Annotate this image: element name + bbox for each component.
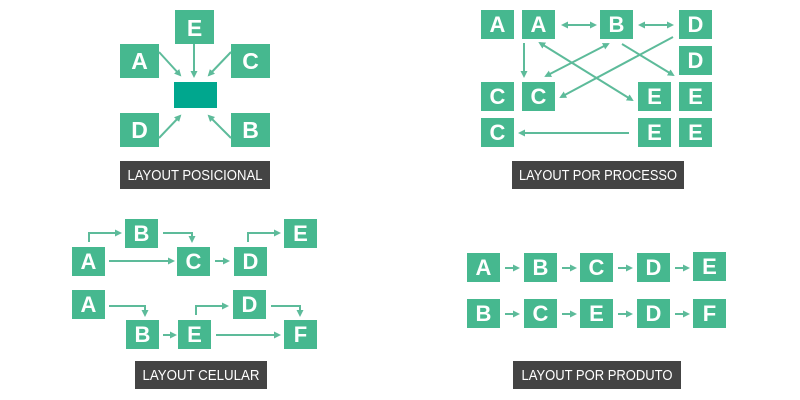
boxes [481,10,712,147]
label: layout por processo: LAYOUT POR PROCESSO [519,168,677,184]
central work area [174,82,217,108]
boxes: E [187,322,202,347]
panel: layout por produto [467,252,726,389]
boxes: C [490,120,506,145]
boxes: C [531,84,547,109]
boxes: A [81,292,97,317]
boxes: B [135,322,150,347]
boxes: C [186,249,202,274]
boxes: A [476,255,492,280]
box B: B [242,117,259,143]
boxes: C [533,301,549,326]
boxes: E [589,301,604,326]
boxes [72,219,317,349]
boxes: C [490,84,506,109]
box C [231,44,270,78]
boxes: D [243,249,258,274]
panel: layout celular [72,219,317,389]
box A: A [131,48,148,74]
boxes: B [609,12,624,37]
arrows into center [159,44,231,138]
boxes: F [294,322,307,347]
boxes: E [647,84,662,109]
label: layout por produto: LAYOUT POR PRODUTO [522,368,672,384]
boxes: B [134,221,149,246]
boxes: D [688,12,703,37]
product arrows [505,268,688,314]
cell arrows [89,233,300,335]
boxes: D [242,292,257,317]
boxes: D [646,301,661,326]
panel: layout por processo [481,10,712,189]
boxes: F [703,301,716,326]
box E [175,10,214,44]
label: layout posicional [120,161,270,189]
label: layout celular: LAYOUT CELULAR [142,368,260,384]
boxes: B [476,301,491,326]
boxes: B [533,255,548,280]
boxes: E [702,254,717,279]
boxes: E [293,221,308,246]
box C: C [242,48,259,74]
box D: D [131,117,148,143]
label: layout celular [135,361,267,389]
boxes: E [647,120,662,145]
boxes: A [531,12,547,37]
boxes [467,252,726,328]
panel: layout posicional [120,10,270,189]
box A [120,44,159,78]
box E: E [187,15,202,41]
boxes: A [490,12,506,37]
label: layout por produto [513,361,681,389]
box D [120,113,159,147]
boxes: A [81,249,97,274]
boxes: D [688,48,703,73]
box B [231,113,270,147]
label: layout por processo [512,161,684,189]
boxes: E [688,120,703,145]
boxes: E [688,84,703,109]
process arrows [520,25,673,133]
boxes: D [646,255,661,280]
boxes: C [589,255,605,280]
label: layout posicional: LAYOUT POSICIONAL [128,168,262,184]
